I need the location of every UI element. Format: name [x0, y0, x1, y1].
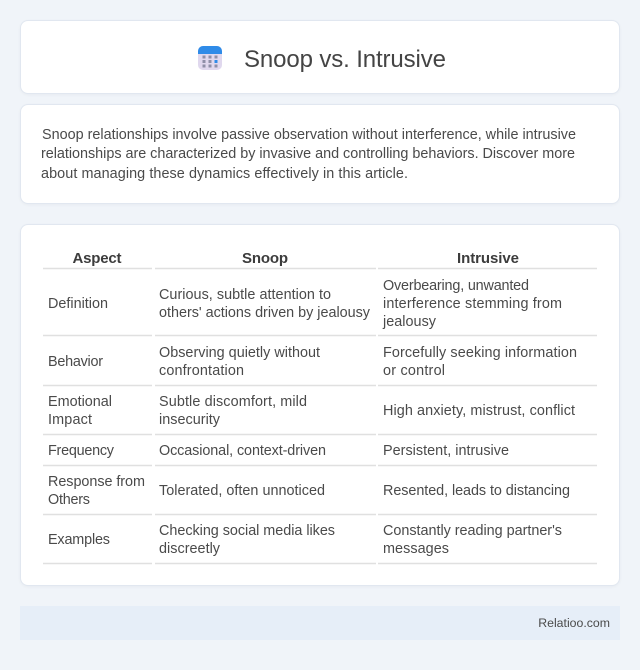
text block: introduction: Snoop relationships involve passive observation without interference, while intrusive — [42, 127, 576, 143]
footer text: site credit: Relatioo.com — [538, 616, 610, 630]
text block: introduction: about managing these dynamics effectively in this article. — [41, 166, 408, 182]
row: examples: messages — [383, 541, 449, 557]
row: emotional impact: insecurity — [159, 412, 221, 428]
row: frequency — [43, 443, 597, 466]
panel: introduction — [20, 104, 620, 204]
row: response from others: Resented, leads to distancing — [383, 483, 570, 499]
row: behavior — [43, 345, 597, 386]
row: response from others: Others — [48, 492, 90, 508]
row: definition: Curious, subtle attention to — [159, 287, 331, 303]
row: definition — [43, 278, 597, 336]
row: emotional impact — [43, 394, 597, 434]
row: behavior: Behavior — [48, 354, 103, 370]
row: frequency: Occasional, context-driven — [159, 443, 326, 459]
row: definition: others' actions driven by jealousy — [159, 305, 371, 321]
row: frequency: Frequency — [48, 443, 115, 459]
row: emotional impact: Impact — [48, 412, 92, 428]
row: response from others — [43, 474, 597, 514]
row: examples: Constantly reading partner's — [383, 523, 562, 539]
row: examples — [43, 523, 597, 564]
row: definition: interference stemming from — [383, 296, 562, 312]
row: emotional impact: Subtle discomfort, mild — [159, 394, 307, 410]
row: response from others: Response from — [48, 474, 145, 490]
row: behavior: confrontation — [159, 363, 244, 379]
row: definition: Definition — [48, 296, 108, 312]
table header: Intrusive — [457, 250, 519, 267]
table header — [43, 250, 597, 268]
text block: introduction — [41, 127, 576, 182]
row: examples: discreetly — [159, 541, 221, 557]
table header: Snoop — [242, 250, 288, 267]
title: Snoop vs. Intrusive — [244, 46, 446, 73]
panel: comparison table — [20, 224, 620, 586]
row: examples: Checking social media likes — [159, 523, 335, 539]
row: examples: Examples — [48, 532, 110, 548]
icon: calendar — [198, 46, 222, 70]
row: emotional impact: Emotional — [48, 394, 112, 410]
panel: title header — [20, 20, 620, 94]
row: behavior: or control — [383, 363, 445, 379]
table header: Aspect — [72, 250, 122, 267]
row: response from others: Tolerated, often unnoticed — [159, 483, 325, 499]
row: behavior: Forcefully seeking information — [383, 345, 577, 361]
row: behavior: Observing quietly without — [159, 345, 320, 361]
footer bar — [20, 606, 620, 640]
row: definition: Overbearing, unwanted — [383, 278, 529, 294]
text block: introduction: relationships are characterized by invasive and controlling behaviors. Discover more — [41, 146, 575, 162]
row: definition: jealousy — [382, 314, 437, 330]
row: frequency: Persistent, intrusive — [383, 443, 509, 459]
row: emotional impact: High anxiety, mistrust, conflict — [383, 403, 575, 419]
